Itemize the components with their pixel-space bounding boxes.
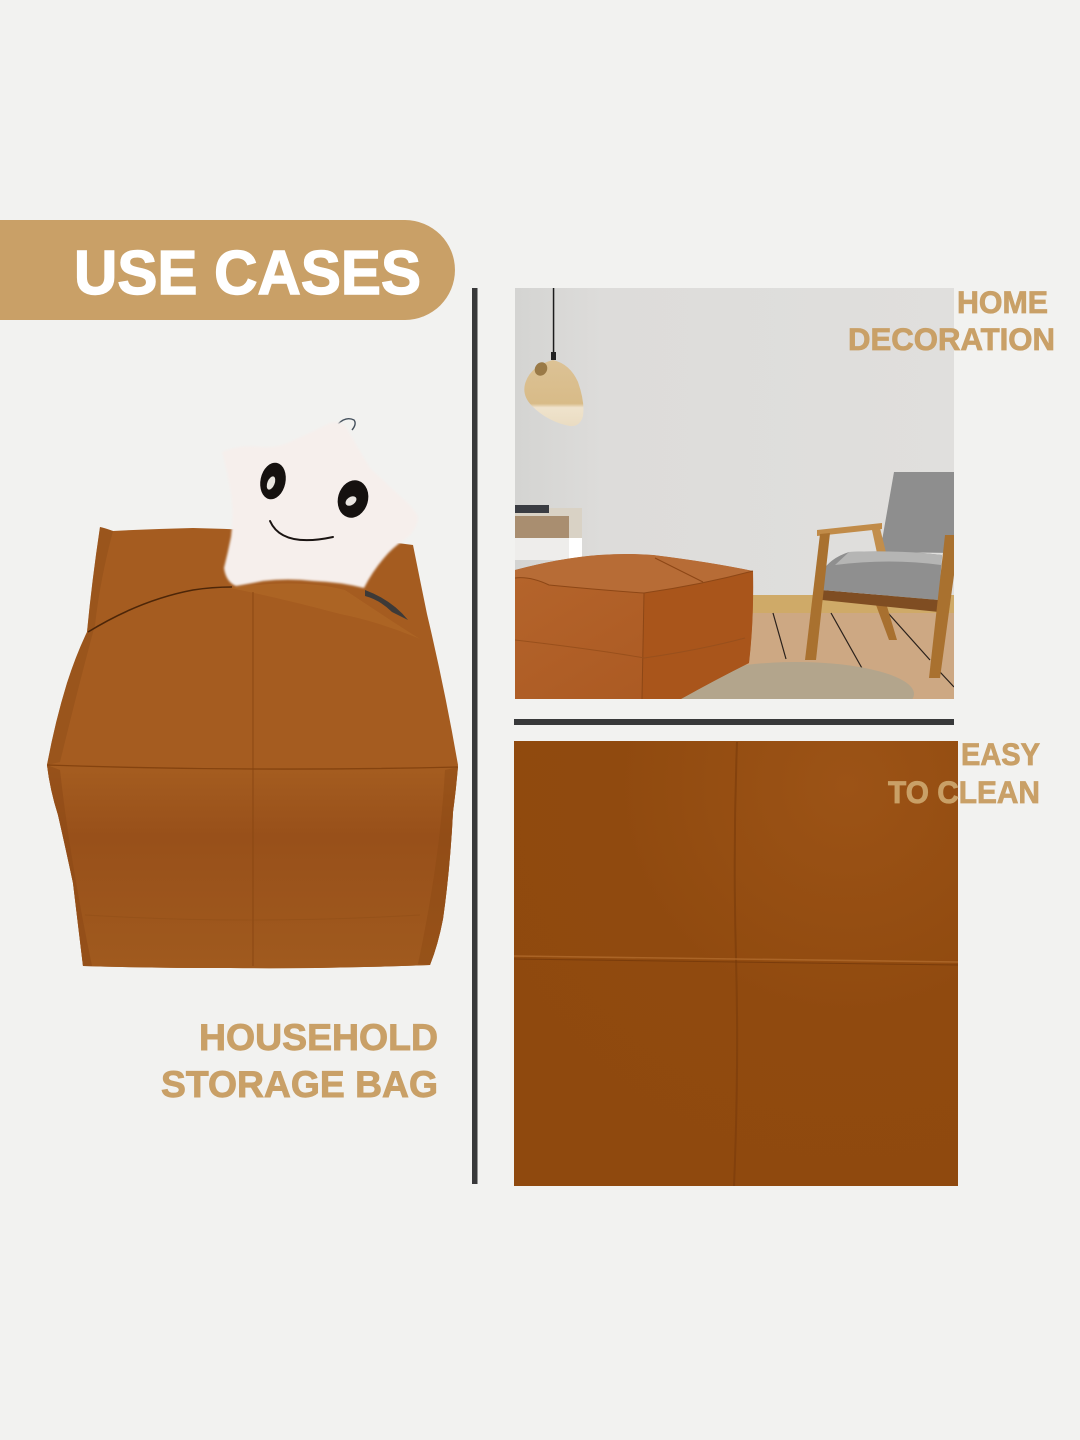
baseboard and floor <box>744 595 954 699</box>
panel: home decoration <box>515 284 1055 726</box>
vertical divider <box>472 288 478 1184</box>
panel: household storage bag <box>47 419 458 1105</box>
heading pill: use cases <box>0 220 455 320</box>
label: home decoration <box>848 284 1055 357</box>
jute rug <box>682 662 914 699</box>
plush star toy <box>222 419 418 588</box>
side table with book <box>515 505 582 560</box>
label: easy to clean <box>888 736 1040 810</box>
label: easy to clean: EASY <box>961 736 1040 772</box>
pendant lamp <box>524 288 583 426</box>
leather pouf in room <box>515 554 753 699</box>
wall <box>515 288 954 618</box>
label: home decoration: DECORATION <box>848 321 1055 357</box>
panel: easy to clean <box>514 736 1040 1186</box>
photo: room with pouf and armchair <box>515 288 954 726</box>
heading pill: use cases: USE CASES <box>74 239 421 308</box>
label: easy to clean: TO CLEAN <box>888 774 1040 810</box>
photo: leather pouf with plush star <box>47 419 458 968</box>
label: home decoration: HOME <box>957 284 1048 320</box>
label: household storage bag: HOUSEHOLD <box>199 1017 438 1058</box>
photo: stitched leather close-up <box>514 741 958 1186</box>
label: household storage bag: STORAGE BAG <box>161 1064 438 1105</box>
armchair <box>805 472 954 678</box>
horizontal divider <box>514 719 954 725</box>
infographic canvas <box>0 220 1054 1186</box>
label: household storage bag <box>161 1017 438 1105</box>
leather pouf body <box>47 527 458 968</box>
